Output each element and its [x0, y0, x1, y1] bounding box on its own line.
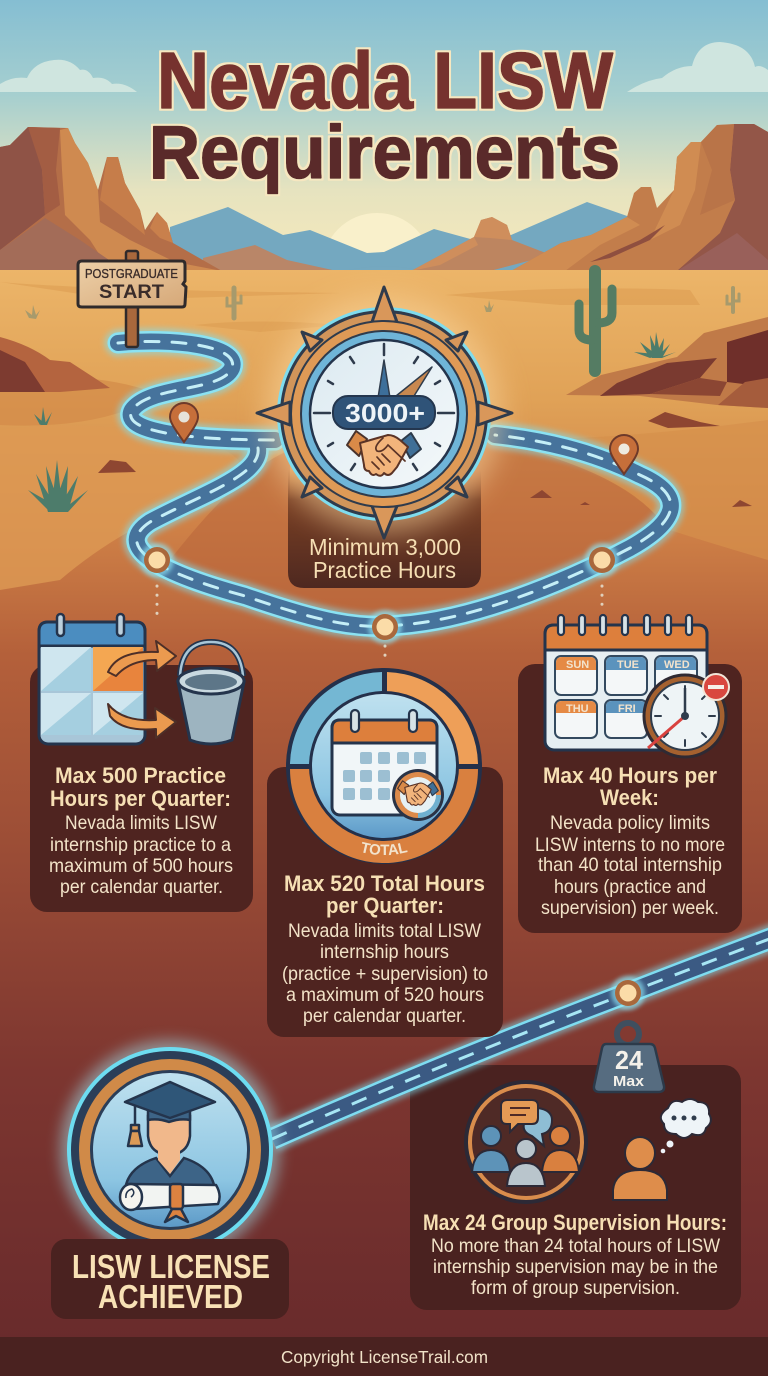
node center [368, 610, 402, 644]
icon: 24 max weight [594, 1023, 664, 1092]
panel body text: maximum of 500 hours [49, 855, 233, 877]
rings [67, 1047, 273, 1253]
winding road [118, 341, 671, 626]
3000+ pill [333, 396, 435, 429]
panel body text [535, 812, 725, 919]
title: Requirements [149, 110, 620, 194]
panel: max 24 group supervision [410, 1023, 741, 1310]
node right [585, 543, 619, 577]
icon: handshake [347, 431, 421, 476]
cactus large [579, 271, 612, 371]
panel body text: Nevada limits LISW [65, 812, 218, 834]
clock hands [378, 360, 432, 398]
panel box [518, 664, 742, 933]
achieved label: LISW LICENSE [72, 1248, 270, 1285]
person blue [472, 1126, 510, 1172]
small pebbles [98, 412, 752, 507]
icon: 24 max weight: Max [613, 1073, 645, 1090]
icon: weekly calendar: WED [664, 659, 690, 671]
desert ground [0, 270, 768, 1340]
graduate medallion [60, 1040, 280, 1260]
icon: group discussion circle [464, 1080, 588, 1204]
panel body text: supervision) per week. [541, 897, 719, 919]
panel box [288, 470, 481, 588]
icon: weekly calendar: FRI [618, 703, 636, 715]
panel: max 520 total hours [267, 668, 503, 1037]
sign text: START [99, 282, 164, 303]
panel body text: hours (practice and [554, 876, 706, 898]
panel heading: per Quarter: [326, 893, 444, 918]
icon: graduate neck [158, 1150, 180, 1174]
road node lower [611, 976, 645, 1010]
panel: LISW license achieved [51, 1239, 289, 1319]
left mesa [0, 127, 222, 271]
icon: quarter calendar [39, 614, 145, 744]
distant blue mountains [170, 202, 630, 272]
icon: weekly calendar [545, 615, 707, 750]
icon: graduation cap [125, 1082, 215, 1146]
sun [322, 213, 432, 323]
small cactus right [727, 288, 739, 312]
title [149, 36, 620, 194]
panel body text: internship supervision may be in the [433, 1256, 718, 1278]
title: Nevada LISW [157, 36, 613, 125]
achieved label [72, 1248, 270, 1315]
icon: no-entry badge [703, 674, 729, 700]
post [126, 251, 138, 347]
icon: wall clock [644, 675, 726, 757]
icon: diploma scroll [120, 1184, 220, 1222]
panel body text: LISW interns to no more [535, 834, 725, 856]
panel text: Minimum 3,000 [309, 534, 461, 560]
person grey [507, 1139, 545, 1186]
panel heading: Week: [600, 785, 659, 810]
icon: graduate shoulders [125, 1158, 215, 1192]
icon: handshake badge [392, 769, 444, 821]
panel text: Practice Hours [313, 557, 456, 583]
glow [60, 1040, 280, 1260]
panel heading: Max 520 Total Hours [284, 871, 485, 896]
panel body text: form of group supervision. [471, 1277, 680, 1299]
panel body text: a maximum of 520 hours [286, 984, 484, 1006]
icon: solo person [613, 1137, 667, 1200]
panel body text [282, 920, 488, 1027]
copyright text: Copyright LicenseTrail.com [281, 1347, 488, 1367]
footer bar [0, 1337, 768, 1376]
small hill [203, 245, 337, 271]
icon: calendar [332, 710, 437, 815]
TOTAL label: TOTAL [362, 842, 408, 856]
cloud right [627, 42, 768, 92]
clock face [310, 340, 458, 488]
rocks left [0, 337, 110, 392]
achieved label: ACHIEVED [98, 1278, 243, 1315]
panel box [267, 767, 503, 1037]
icon: thought cloud [661, 1099, 711, 1153]
small cactus left [227, 288, 241, 318]
panel: max 500 practice hours [30, 614, 253, 912]
person orange [542, 1126, 579, 1172]
map pins [170, 403, 638, 474]
panel body text: internship hours [320, 941, 449, 963]
sign text [85, 266, 178, 303]
panel heading [543, 763, 717, 810]
icon: weekly calendar: THU [566, 703, 589, 715]
3000+ pill: 3000+ [345, 398, 425, 428]
panel body text: No more than 24 total hours of LISW [431, 1235, 721, 1257]
panel heading [50, 763, 231, 811]
bottom road to license [272, 935, 768, 1139]
start signpost [78, 251, 186, 347]
sand bands [0, 426, 242, 590]
icon: arrows into bucket [108, 641, 176, 738]
panel body text: Nevada limits total LISW [288, 920, 482, 942]
panel body text [431, 1235, 721, 1299]
sign board [78, 261, 186, 307]
inner rings [290, 320, 478, 508]
panel heading: Max 500 Practice [55, 763, 226, 788]
panel body text: than 40 total internship [538, 854, 722, 876]
panel heading [284, 871, 485, 918]
rocks right [566, 317, 768, 408]
panel body text: per calendar quarter. [60, 876, 223, 898]
panel box [30, 665, 253, 912]
panel text [309, 534, 461, 583]
orange speech bubble [501, 1100, 538, 1132]
panel: max 40 hours per week [518, 615, 742, 933]
outer rings [277, 307, 491, 521]
road nodes [140, 543, 619, 644]
agave plants [25, 300, 676, 512]
panel heading: Hours per Quarter: [50, 786, 231, 811]
compass star points [257, 287, 512, 538]
panel body text: per calendar quarter. [303, 1005, 466, 1027]
blue speech bubble [524, 1108, 552, 1146]
panel heading: Max 40 Hours per [543, 763, 717, 788]
right mesa [511, 124, 768, 271]
mid butte [411, 217, 551, 271]
icon: weekly calendar: SUN [566, 659, 589, 671]
cloud left [0, 60, 137, 92]
panel body text [49, 812, 233, 898]
sky [0, 0, 768, 272]
panel body text: (practice + supervision) to [282, 963, 488, 985]
pin left [170, 403, 198, 442]
icon: graduate face [148, 1116, 190, 1155]
glow [266, 296, 502, 532]
clock ticks [314, 344, 454, 470]
panel box [51, 1239, 289, 1319]
icon: 24 max weight: 24 [615, 1045, 644, 1075]
icon: weekly calendar: TUE [617, 659, 639, 671]
pin right [610, 435, 638, 474]
dotted connectors [157, 586, 602, 662]
sign text: POSTGRADUATE [85, 266, 178, 281]
panel: minimum 3,000 practice hours [288, 470, 481, 588]
total ring medallion [286, 668, 482, 864]
node left [140, 543, 174, 577]
total label arc guide [314, 821, 454, 855]
panel body text: internship practice to a [50, 834, 231, 856]
icon: bucket [178, 642, 244, 744]
panel box [410, 1065, 741, 1310]
panel body text: Nevada policy limits [550, 812, 710, 834]
compass clock medallion [257, 287, 512, 538]
